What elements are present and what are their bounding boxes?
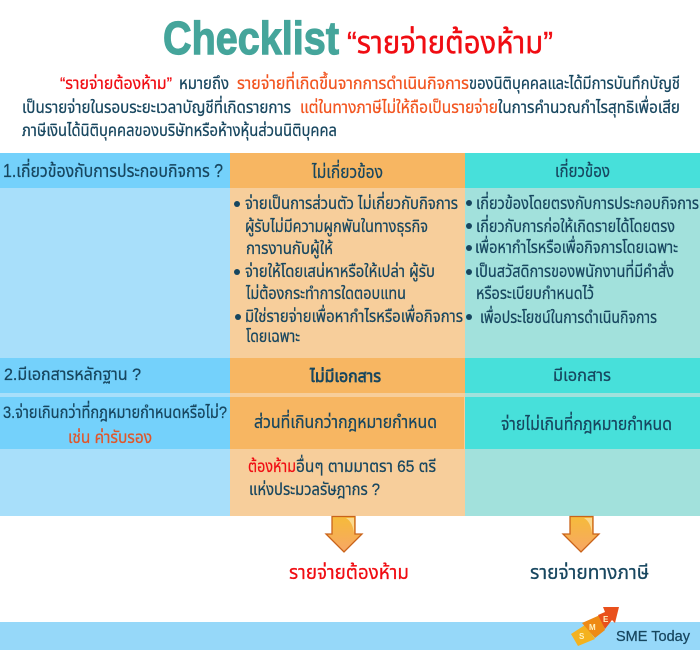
intro paragraph: “รายจ่ายต้องห้าม” (60, 73, 172, 93)
question 2: 2.มีเอกสารหลักฐาน ? (4, 365, 141, 384)
panel: not related column (230, 153, 465, 516)
intro paragraph: หมายถึง (179, 74, 229, 93)
question 3: เช่น ค่ารับรอง (68, 428, 152, 447)
list: not related reasons: จ่ายเป็นการส่วนตัว ไม่เกี่ยวกับกิจการ (245, 191, 458, 213)
intro paragraph: รายจ่ายที่เกิดขึ้นจากการดำเนินกิจการ (237, 71, 469, 93)
question 3: 3.จ่ายเกินกว่าที่กฎหมายกำหนดหรือไม่? (3, 400, 227, 422)
icon: SME logo (571, 607, 619, 646)
footer bar (0, 622, 700, 650)
list: related reasons (466, 191, 699, 327)
label: within legal limit: จ่ายไม่เกินที่กฎหมายกำหนด (501, 411, 672, 434)
label: has documents: มีเอกสาร (553, 366, 611, 385)
list: not related reasons: การงานกับผู้ให้ (246, 238, 333, 260)
footer credit: SME Today (616, 628, 690, 645)
title: “รายจ่ายต้องห้าม” (347, 25, 553, 60)
label: portion above legal limit: ส่วนที่เกินกว่ากฎหมายกำหนด (254, 409, 437, 432)
intro paragraph: แต่ในทางภาษีไม่ให้ถือเป็นรายจ่าย (300, 97, 498, 117)
list: not related reasons: ผู้รับไม่มีความผูกพันในทางธุรกิจ (245, 216, 428, 238)
list: not related reasons: จ่ายให้โดยเสน่หาหรือให้เปล่า ผู้รับ (245, 261, 435, 283)
list: related reasons: หรือระเบียบกำหนดไว้ (476, 283, 594, 303)
note: section 65 ter: อื่นๆ ตามมาตรา 65 ตรี (296, 454, 436, 476)
arrow: to tax expense (563, 516, 599, 552)
list: not related reasons: มิใช่รายจ่ายเพื่อหากำไรหรือเพื่อกิจการ (245, 304, 463, 326)
note: section 65 ter: แห่งประมวลรัษฎากร ? (249, 480, 380, 499)
title (163, 12, 553, 64)
list: not related reasons: โดยเฉพาะ (246, 327, 300, 346)
list: not related reasons: ไม่ต้องกระทำการใดตอบแทน (245, 283, 406, 303)
intro paragraph: ภาษีเงินได้นิติบุคคลของบริษัทหรือห้างหุ้นส่วนนิติบุคคล (22, 120, 337, 141)
intro paragraph: เป็นรายจ่ายในรอบระยะเวลาบัญชีที่เกิดรายการ (22, 95, 291, 117)
question 3 (3, 400, 227, 447)
list: not related reasons (234, 191, 463, 346)
result: prohibited expense: รายจ่ายต้องห้าม (289, 561, 409, 584)
intro paragraph: ในการคำนวณกำไรสุทธิเพื่อเสีย (498, 95, 680, 118)
question 1: 1.เกี่ยวข้องกับการประกอบกิจการ ? (3, 158, 223, 181)
note: section 65 ter: ต้องห้าม (248, 456, 296, 476)
arrow: to prohibited expense (326, 516, 362, 552)
icon: SME logo: E (603, 615, 609, 624)
icon: SME logo: M (589, 623, 596, 632)
panel: question column (0, 153, 230, 516)
list: related reasons: เพื่อประโยชน์ในการดำเนินกิจการ (480, 305, 657, 327)
title: Checklist (163, 12, 339, 64)
heading: not related: ไม่เกี่ยวข้อง (311, 159, 383, 182)
note: section 65 ter (248, 454, 436, 499)
heading: related: เกี่ยวข้อง (555, 158, 610, 181)
label: no documents: ไม่มีเอกสาร (309, 367, 381, 386)
result: tax expense: รายจ่ายทางภาษี (530, 561, 649, 584)
panel: related column (465, 153, 700, 516)
icon: SME logo: S (579, 632, 585, 641)
intro paragraph (22, 71, 680, 141)
